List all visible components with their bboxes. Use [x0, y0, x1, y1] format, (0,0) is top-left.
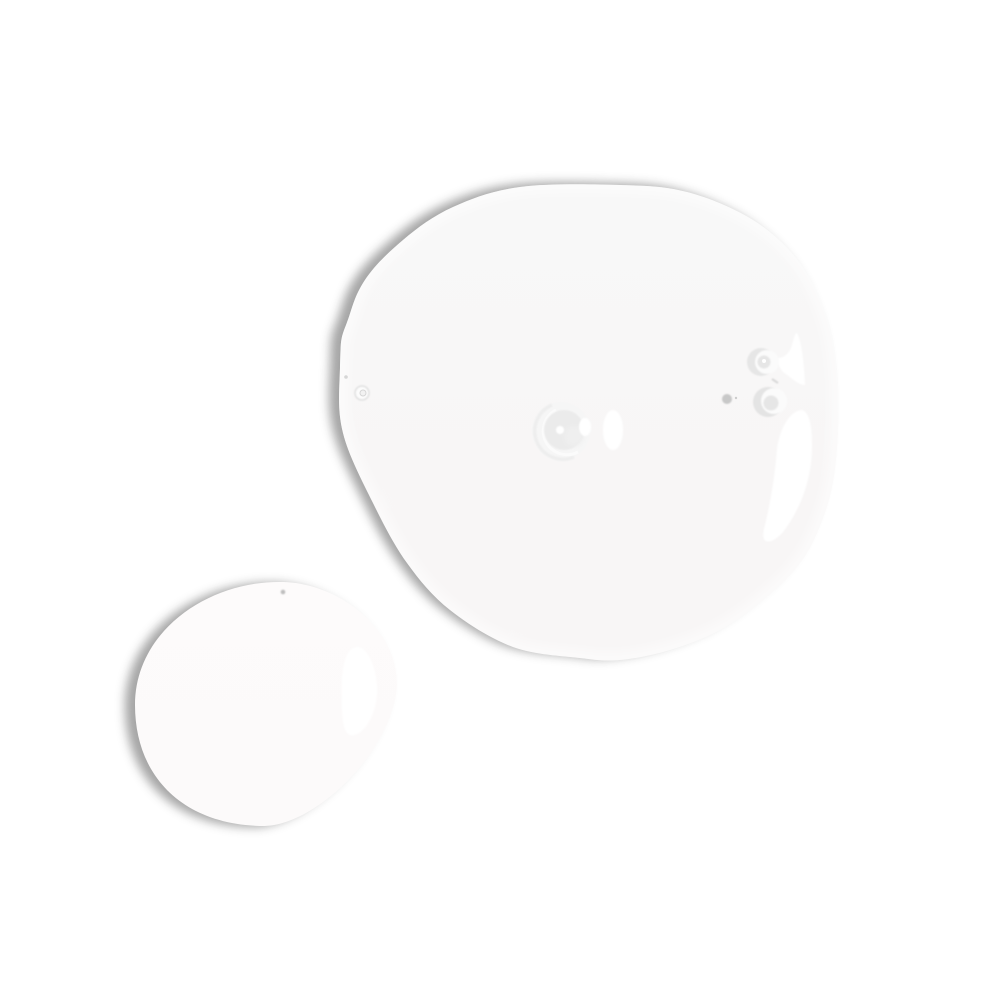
small droplet highlight	[342, 647, 377, 735]
small grey speck	[722, 394, 737, 404]
left bubble	[355, 386, 369, 400]
soft light rim inside the droplet edge	[339, 188, 515, 637]
central bubble	[532, 402, 591, 460]
illustration: two white cream droplets	[119, 176, 825, 833]
upper right bubble	[747, 348, 779, 376]
small droplet shadow	[125, 583, 387, 827]
left speck	[344, 375, 348, 379]
upper glossy highlight	[778, 333, 805, 385]
small droplet speck	[281, 590, 285, 594]
large droplet	[329, 182, 839, 661]
large glossy highlight	[763, 410, 812, 542]
large droplet shadow	[329, 182, 829, 659]
small droplet body	[135, 582, 397, 826]
central bubble highlight	[603, 410, 623, 450]
large droplet body	[339, 184, 839, 661]
lower right bubble	[753, 379, 787, 417]
small droplet	[125, 582, 397, 827]
